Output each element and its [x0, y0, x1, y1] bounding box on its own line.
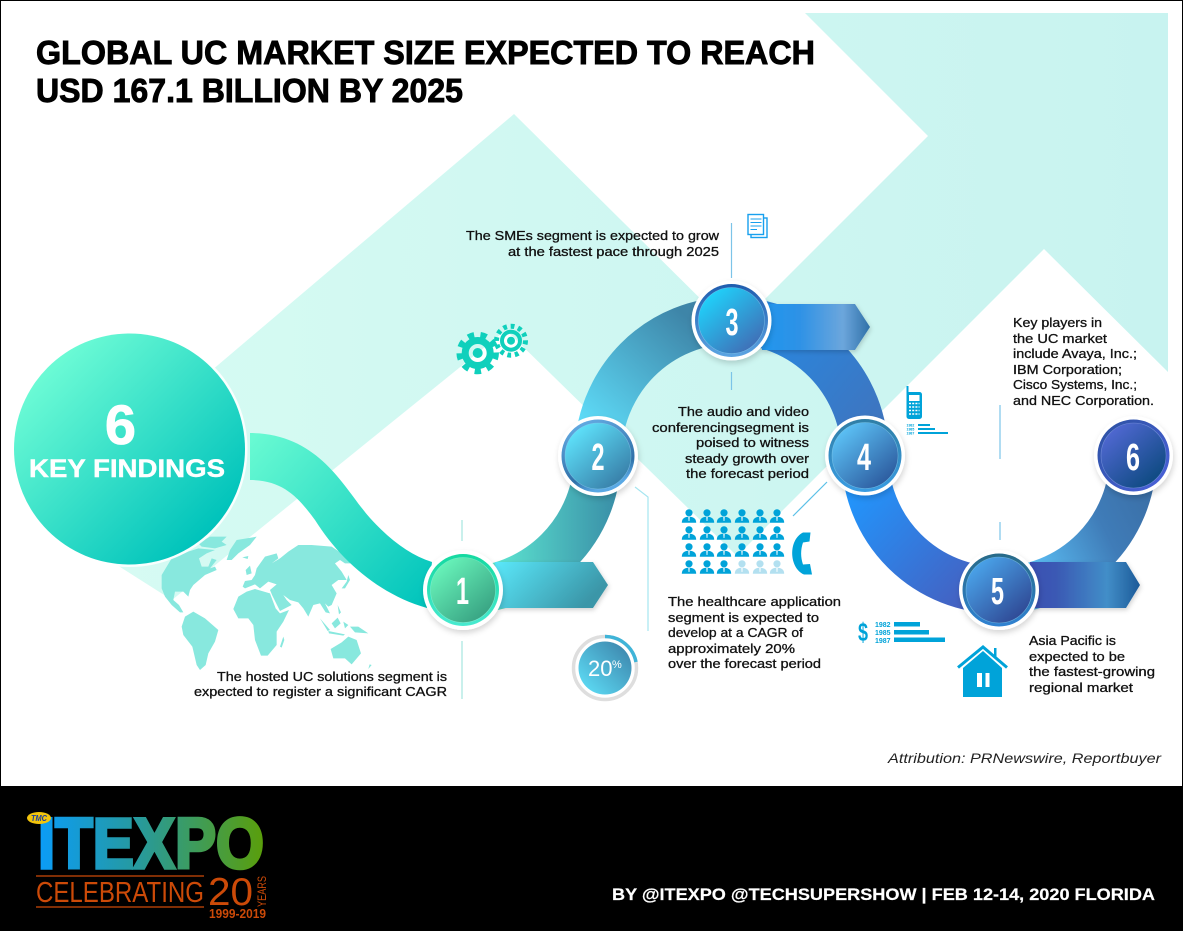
- text: key players: IBM Corporation;: [1013, 362, 1122, 377]
- icon: mobile phone with bars: 1982: [906, 424, 914, 428]
- icon: dollar with bars: $: [858, 617, 868, 647]
- step 6 badge: [1094, 416, 1173, 495]
- step 1 badge: [423, 550, 503, 630]
- icon: people grid: [682, 509, 784, 574]
- text: healthcare application: approximately 20%: [668, 641, 796, 656]
- title: [36, 34, 815, 109]
- step 4 badge: [825, 416, 905, 496]
- footer logo: ITEXPO: TMC: [31, 814, 47, 823]
- step 5 badge: [959, 550, 1039, 630]
- footer logo: ITEXPO: ITEXPO: [38, 805, 264, 884]
- text: healthcare application: over the forecast period: [668, 656, 821, 671]
- text: Asia Pacific: [1029, 633, 1155, 695]
- text: key players: the UC market: [1013, 331, 1107, 346]
- text: audio and video conferencing: The audio and video: [678, 404, 809, 419]
- text: key players: and NEC Corporation.: [1013, 393, 1154, 408]
- circle: 6 key findings: [12, 331, 248, 567]
- icon: telephone handset: [792, 532, 812, 574]
- footer logo: ITEXPO: [27, 805, 269, 921]
- text: audio and video conferencing: conferencingsegment is: [652, 420, 810, 435]
- footer logo: ITEXPO: 20: [208, 871, 253, 914]
- text: audio and video conferencing: steady growth over: [685, 451, 810, 466]
- step 2 badge: 2: [592, 437, 604, 479]
- text: audio and video conferencing: the forecast period: [686, 466, 809, 481]
- arc: step 1 to 2: [463, 456, 598, 590]
- text: hosted UC solutions: The hosted UC solutions segment is: [217, 669, 448, 684]
- text: Asia Pacific: expected to be: [1029, 649, 1125, 664]
- icon: dollar with bars: 1982: [875, 622, 891, 629]
- text: healthcare application: [668, 594, 841, 671]
- title: USD 167.1 BILLION BY 2025: [36, 72, 463, 109]
- step 4 badge: 4: [857, 437, 871, 479]
- world map: [162, 537, 372, 670]
- text: SMEs segment: at the fastest pace through 2025: [508, 244, 719, 259]
- text: SMEs segment: The SMEs segment is expected to grow: [466, 228, 720, 243]
- ribbon arrow: step 5: [1030, 562, 1140, 608]
- footer bar: [0, 786, 1183, 931]
- text: healthcare application: The healthcare application: [668, 594, 841, 609]
- text: key players: include Avaya, Inc.;: [1013, 346, 1137, 361]
- text: Asia Pacific: regional market: [1029, 680, 1133, 695]
- gauge: 20 percent: %: [612, 659, 622, 671]
- connector lines: [462, 223, 1000, 699]
- text: key players: [1013, 315, 1154, 408]
- icon: dollar with bars: 1987: [875, 638, 891, 645]
- text: key players: Key players in: [1013, 315, 1102, 330]
- step 1 badge: 1: [456, 571, 469, 613]
- gauge: 20 percent: 20: [588, 656, 612, 681]
- arc: step 3 to 4: [732, 320, 865, 456]
- text: audio and video conferencing: [652, 404, 810, 481]
- text: hosted UC solutions: [194, 669, 448, 699]
- icon: mobile phone with bars: 1987: [906, 432, 914, 436]
- text: healthcare application: develop at a CAGR of: [668, 625, 803, 640]
- icon: mobile phone with bars: 1985: [906, 428, 914, 432]
- arc: step 4 to 5: [865, 456, 999, 590]
- icon: gears: [460, 326, 526, 371]
- step 3 badge: [692, 280, 772, 360]
- attribution: Attribution: PRNewswire, Reportbuyer: [887, 750, 1163, 766]
- text: Asia Pacific: the fastest-growing: [1029, 664, 1155, 679]
- text: healthcare application: segment is expected to: [668, 610, 819, 625]
- gauge: 20 percent: [574, 636, 636, 700]
- footer logo: ITEXPO: YEARS: [255, 876, 269, 907]
- circle: 6 key findings: 6: [105, 393, 136, 456]
- footer logo: ITEXPO: CELEBRATING: [36, 877, 204, 909]
- icon: dollar with bars: [858, 617, 945, 647]
- text: SMEs segment: [466, 228, 720, 259]
- arc: step 2 to 3: [598, 320, 732, 456]
- footer logo: ITEXPO: 1999-2019: [209, 906, 266, 921]
- ribbon arrow: step 1: [495, 562, 608, 608]
- icon: house: [958, 647, 1007, 697]
- icon: dollar with bars: 1985: [875, 630, 891, 637]
- footer event text: BY @ITEXPO @TECHSUPERSHOW | FEB 12-14, 2020 FLORIDA: [612, 885, 1155, 904]
- step 3 badge: 3: [726, 302, 738, 344]
- circle: 6 key findings: KEY FINDINGS: [29, 455, 225, 483]
- step 5 badge: 5: [991, 571, 1004, 613]
- background arrows: [40, 13, 1168, 600]
- s-curve band to step 1: [250, 433, 432, 608]
- text: key players: Cisco Systems, Inc.;: [1013, 377, 1137, 392]
- step 6 badge: 6: [1126, 437, 1140, 479]
- step 2 badge: [558, 416, 638, 496]
- text: Asia Pacific: Asia Pacific is: [1029, 633, 1117, 648]
- text: audio and video conferencing: poised to witness: [696, 435, 810, 450]
- icon: mobile phone with bars: [906, 386, 948, 436]
- icon: document: [748, 214, 767, 238]
- ribbon arrow: step 3: [762, 304, 870, 350]
- text: hosted UC solutions: expected to register a significant CAGR: [194, 684, 447, 699]
- title: GLOBAL UC MARKET SIZE EXPECTED TO REACH: [36, 34, 815, 71]
- arc: step 5 to 6: [999, 456, 1133, 590]
